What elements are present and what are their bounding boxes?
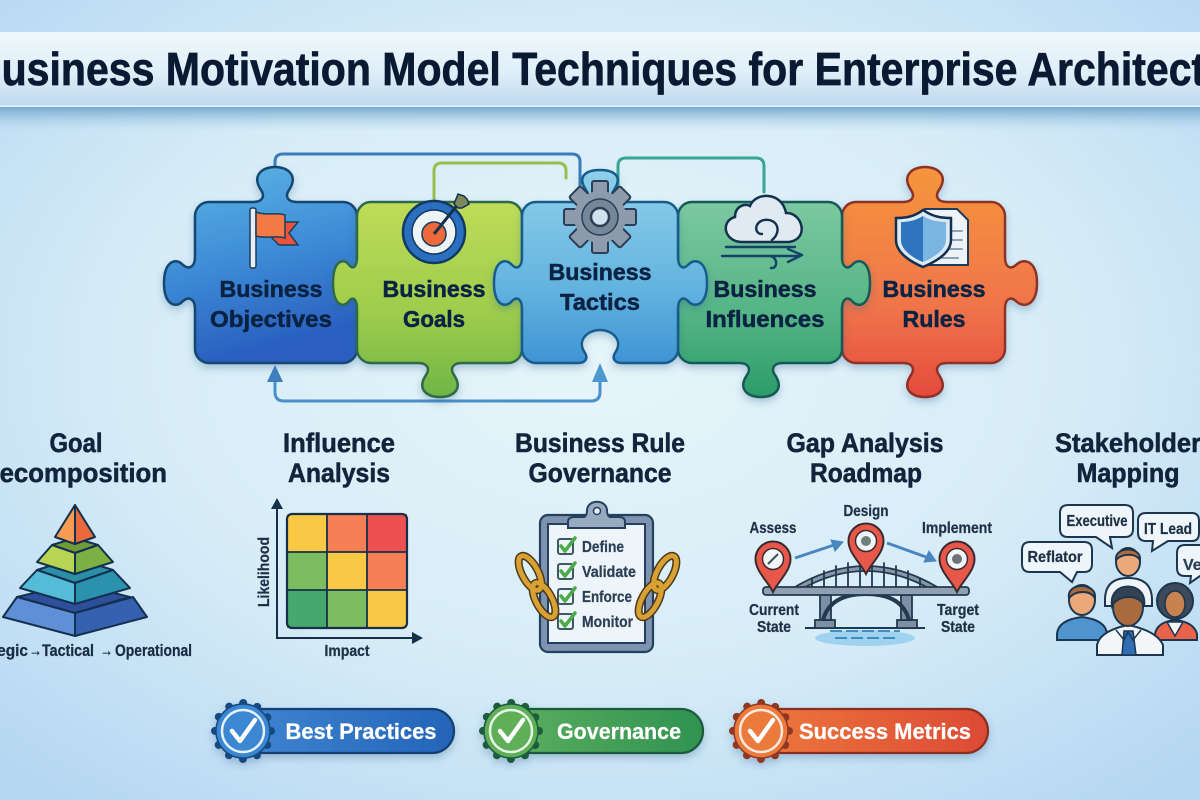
icon: gear <box>564 181 636 253</box>
panel: influence analysis <box>256 428 423 660</box>
icon: shield and document <box>896 209 968 267</box>
roadmap labels: State <box>941 619 975 636</box>
panel: stakeholder mapping <box>1022 428 1200 655</box>
bubble: vendor <box>1177 545 1200 583</box>
icon: left chain <box>514 552 560 621</box>
puzzle: business goals <box>333 202 522 397</box>
checklist <box>558 538 636 631</box>
label: business tactics: Business <box>548 259 652 285</box>
person: center <box>1097 586 1163 655</box>
label: business goals <box>382 276 486 332</box>
label: business objectives <box>210 276 332 332</box>
label: business rules: Rules <box>902 306 966 332</box>
heading: Roadmap <box>810 458 922 488</box>
badge: best practices <box>215 703 454 759</box>
heading: Influence <box>283 428 395 458</box>
icon: target with arrow <box>403 194 469 263</box>
roadmap arrows <box>795 540 936 562</box>
roadmap labels: Current <box>749 602 800 619</box>
label: business influences: Influences <box>706 306 824 332</box>
caption: → <box>29 641 42 660</box>
heading: Gap Analysis <box>786 428 944 458</box>
bubble: it lead <box>1138 513 1199 551</box>
icon: flag <box>250 208 298 268</box>
icon: cloud and wind <box>722 196 802 268</box>
axis label: impact: Impact <box>324 643 370 660</box>
pyramid <box>3 505 147 636</box>
bubble: reflator: Reflator <box>1028 549 1082 566</box>
label: business tactics <box>548 259 652 315</box>
badge: governance <box>483 703 703 759</box>
label: business tactics: Tactics <box>560 289 640 315</box>
roadmap labels: State <box>757 619 791 636</box>
person: right <box>1155 583 1197 640</box>
panel: business rule governance <box>514 428 685 652</box>
badge: governance: Governance <box>557 719 681 744</box>
badge: success metrics: Success Metrics <box>799 719 971 744</box>
badge: best practices: Best Practices <box>286 719 436 744</box>
panel: gap analysis roadmap <box>749 428 993 646</box>
heat matrix <box>287 514 407 628</box>
checklist: Validate <box>582 564 636 581</box>
heading: Analysis <box>288 458 390 488</box>
pin: implement <box>940 542 974 592</box>
bubble: it lead: IT Lead <box>1144 521 1192 538</box>
heading <box>0 428 167 488</box>
roadmap labels: Assess <box>750 520 797 537</box>
panel: goal decomposition <box>0 428 192 660</box>
heading: Governance <box>528 458 672 488</box>
heading <box>786 428 944 488</box>
pin: assess <box>756 542 790 592</box>
caption: → <box>100 641 113 660</box>
puzzle: business rules <box>842 167 1037 397</box>
label: business rules: Business <box>882 276 986 302</box>
puzzle: business tactics <box>494 170 707 363</box>
axes <box>271 498 423 644</box>
roadmap labels: Design <box>844 503 888 520</box>
heading: Business Rule <box>515 428 685 458</box>
badge: success metrics <box>733 703 988 759</box>
puzzle: business objectives <box>164 167 357 363</box>
label: business influences <box>706 276 824 332</box>
pin: design <box>848 524 884 574</box>
person: back <box>1105 548 1152 606</box>
bubble: executive: Executive <box>1066 513 1128 530</box>
checklist: Define <box>582 539 624 556</box>
bridge <box>763 561 969 646</box>
label: business goals: Business <box>382 276 486 302</box>
clipboard <box>540 502 653 652</box>
puzzle: business influences <box>678 202 870 397</box>
heading <box>283 428 395 488</box>
heading <box>1055 428 1200 488</box>
caption <box>0 641 192 660</box>
title banner <box>0 32 1200 131</box>
puzzle connector lines <box>267 154 764 401</box>
checklist: Enforce <box>582 589 632 606</box>
heading <box>515 428 685 488</box>
roadmap labels <box>749 503 993 636</box>
checklist: Monitor <box>582 614 633 631</box>
caption: Tactical <box>42 641 94 660</box>
icon: right chain <box>634 552 681 621</box>
bubble: reflator <box>1022 542 1092 582</box>
roadmap labels: Target <box>937 602 980 619</box>
bubble: executive <box>1060 505 1133 548</box>
heading: Goal <box>50 428 102 458</box>
label: business goals: Goals <box>403 306 465 332</box>
label: business objectives: Business <box>220 276 322 302</box>
axis label: likelihood: Likelihood <box>256 537 273 607</box>
heading: Mapping <box>1076 458 1180 488</box>
label: business rules <box>882 276 986 332</box>
caption: Operational <box>115 641 192 660</box>
label: business influences: Business <box>714 276 816 302</box>
label: business objectives: Objectives <box>210 306 332 332</box>
person: left <box>1057 585 1107 640</box>
roadmap labels: Implement <box>922 520 993 537</box>
